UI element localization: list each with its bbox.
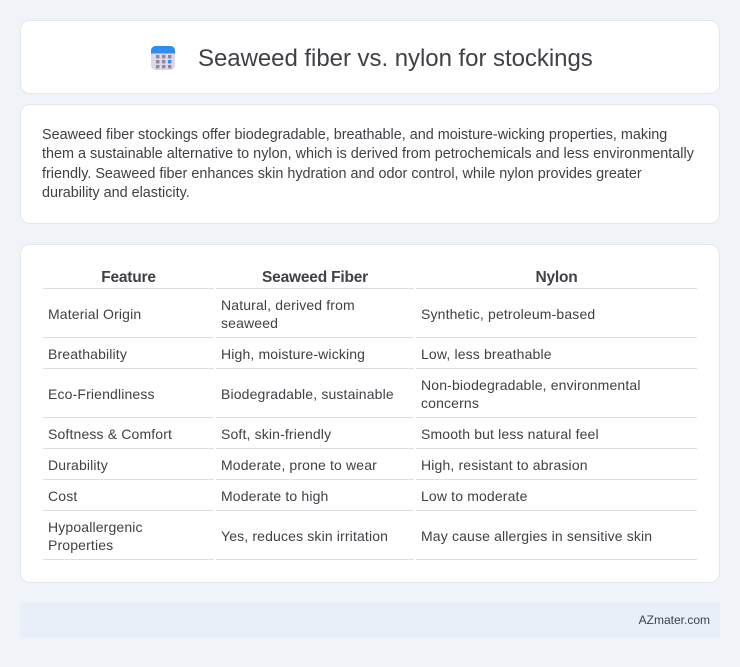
row: eco-friendliness: Eco-Friendliness [48, 386, 155, 402]
table header row: Feature [101, 269, 156, 286]
row: material origin: seaweed [221, 315, 278, 331]
row: breathability [48, 346, 552, 362]
comparison table [43, 269, 697, 560]
text block: intro paragraph [42, 127, 694, 201]
icon: calendar [151, 46, 175, 70]
table header row: Seaweed Fiber [262, 269, 368, 286]
row: durability [48, 457, 588, 473]
row: material origin [48, 297, 595, 331]
text block: intro paragraph: Seaweed fiber stockings offer biodegradable, breathable, and moisture-wicking properties, making [42, 127, 667, 143]
row: material origin: Material Origin [48, 306, 141, 322]
row: cost: Cost [48, 488, 77, 504]
row: breathability: Breathability [48, 346, 127, 362]
footer text: AZmater.com [639, 613, 710, 627]
row: cost: Low to moderate [421, 488, 528, 504]
row: durability: High, resistant to abrasion [421, 457, 588, 473]
row: breathability: High, moisture-wicking [221, 346, 365, 362]
row: durability: Durability [48, 457, 108, 473]
text block: intro paragraph: friendly. Seaweed fiber enhances skin hydration and odor control, while nylon provides greater [42, 166, 642, 182]
row: cost [48, 488, 528, 504]
title: Seaweed fiber vs. nylon for stockings [198, 45, 593, 72]
panel: intro card [20, 104, 720, 224]
row: softness and comfort: Soft, skin-friendly [221, 426, 331, 442]
row: hypoallergenic properties: Properties [48, 537, 113, 553]
row: softness and comfort: Smooth but less natural feel [421, 426, 599, 442]
panel: title card [20, 20, 720, 94]
row: breathability: Low, less breathable [421, 346, 552, 362]
row: softness and comfort: Softness & Comfort [48, 426, 172, 442]
row: softness and comfort [48, 426, 599, 442]
text block: intro paragraph: durability and elasticity. [42, 185, 190, 201]
row: eco-friendliness: concerns [421, 395, 479, 411]
row: hypoallergenic properties [48, 519, 652, 553]
row: material origin: Natural, derived from [221, 297, 355, 313]
footer bar [20, 603, 720, 637]
row: durability: Moderate, prone to wear [221, 457, 377, 473]
row: material origin: Synthetic, petroleum-based [421, 306, 595, 322]
row: eco-friendliness: Non-biodegradable, environmental [421, 377, 641, 393]
panel: comparison table card [20, 244, 720, 583]
text block: intro paragraph: them a sustainable alternative to nylon, which is derived from petrochemicals and less environmentally [42, 146, 694, 162]
row: eco-friendliness: Biodegradable, sustainable [221, 386, 394, 402]
row: hypoallergenic properties: Yes, reduces skin irritation [221, 528, 388, 544]
row: cost: Moderate to high [221, 488, 328, 504]
row: hypoallergenic properties: Hypoallergenic [48, 519, 143, 535]
table header row [101, 269, 578, 286]
row: eco-friendliness [48, 377, 641, 411]
row: hypoallergenic properties: May cause allergies in sensitive skin [421, 528, 652, 544]
table header row: Nylon [535, 269, 578, 286]
